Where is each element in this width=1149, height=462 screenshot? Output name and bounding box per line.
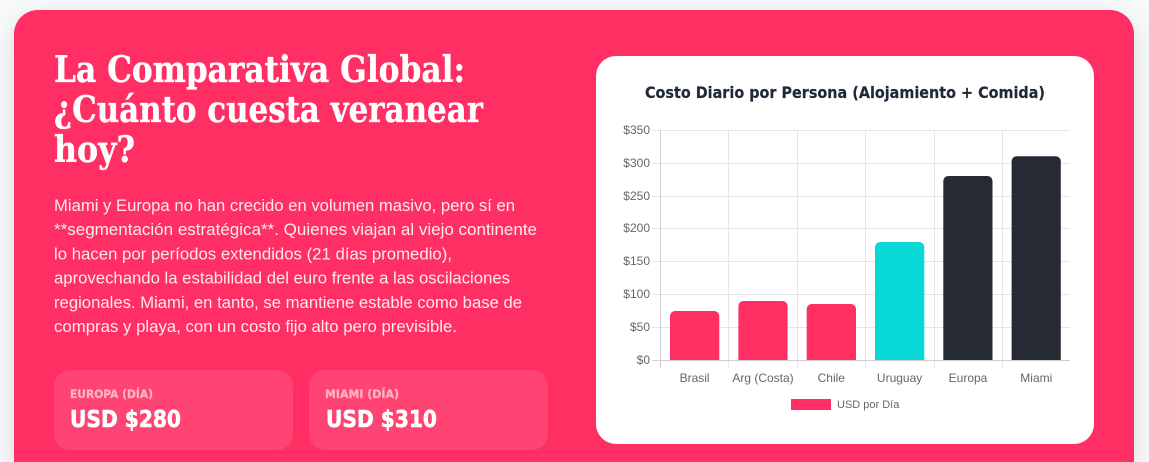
text block: body paragraph: compras y playa, con un costo fijo alto pero previsible.: [54, 318, 457, 336]
text block: body paragraph: aprovechando la estabilidad del euro frente a las oscilaciones: [54, 270, 510, 288]
text block: body paragraph: [54, 197, 537, 336]
x axis labels: Brasil: [680, 371, 710, 385]
stat card: Miami: MIAMI (DÍA): [325, 386, 399, 401]
text block: body paragraph: regionales. Miami, en tanto, se mantiene estable como base de: [54, 294, 522, 312]
stat card: Europa: USD $280: [70, 407, 181, 433]
y axis labels: $250: [623, 189, 650, 203]
x axis labels: Europa: [949, 371, 988, 385]
title: La Comparativa Global:: [54, 49, 465, 91]
y axis labels: $100: [623, 287, 650, 301]
text block: body paragraph: **segmentación estratégica**. Quienes viajan al viejo continente: [54, 221, 537, 239]
text block: body paragraph: Miami y Europa no han crecido en volumen masivo, pero sí en: [54, 197, 515, 215]
y axis labels: $150: [623, 254, 650, 268]
panel: chart card: [596, 56, 1094, 444]
stat card: Europa: [54, 370, 293, 450]
chart heading: Costo Diario por Persona (Alojamiento + Comida): [645, 83, 1045, 102]
x axis labels: Arg (Costa): [732, 371, 794, 385]
y axis labels: [623, 123, 650, 367]
bar chart: [623, 123, 1070, 385]
y axis labels: $0: [637, 353, 650, 367]
title: ¿Cuánto cuesta veranear: [54, 89, 484, 131]
y axis labels: $350: [623, 123, 650, 137]
stat card: Miami: [309, 370, 548, 450]
chart legend: [791, 399, 900, 411]
y axis labels: $300: [623, 156, 650, 170]
chart legend: USD por Día: [837, 399, 900, 411]
text block: body paragraph: lo hacen por períodos extendidos (21 días promedio),: [54, 245, 452, 263]
x axis labels: Uruguay: [877, 371, 922, 385]
y axis labels: $50: [630, 320, 650, 334]
x axis labels: [680, 371, 1052, 385]
x axis labels: Chile: [818, 371, 845, 385]
y axis labels: $200: [623, 221, 650, 235]
title: [54, 49, 484, 171]
stat card: Miami: USD $310: [326, 407, 437, 433]
x axis labels: Miami: [1020, 371, 1052, 385]
stat card: Europa: EUROPA (DÍA): [70, 386, 153, 401]
title: hoy?: [54, 129, 135, 171]
